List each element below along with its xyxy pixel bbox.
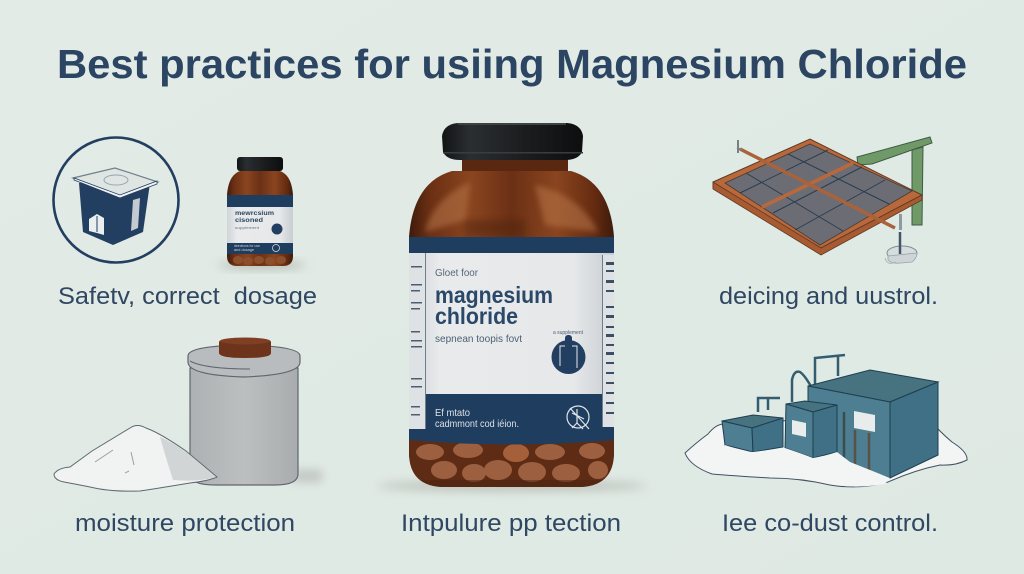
large tank: [808, 370, 938, 478]
label body: [409, 253, 614, 394]
label: deicing and control: deicing and uustrol.: [719, 283, 938, 310]
icon: large amber jar: chloride: [435, 303, 518, 329]
label subtitle: sepnean toopis fovt: [435, 333, 522, 345]
icon: small supplement bottle: cisoned: [235, 218, 263, 224]
front snow mound: [725, 445, 890, 487]
pills: [409, 440, 615, 488]
icon: framed deicing mat: [713, 137, 932, 263]
icon: tanks on snow: [685, 355, 967, 487]
green support: [857, 137, 932, 225]
icon: prohibition symbol: [567, 406, 589, 429]
valve and spool: [885, 214, 917, 263]
snow patch: [685, 420, 967, 487]
jar glass: [409, 171, 614, 487]
panel: ice and dust control: [685, 355, 967, 537]
label dosage text: Ef mtato: [435, 407, 470, 419]
icon: navy label seal: a supplement: [553, 330, 584, 336]
small tank: [722, 415, 783, 452]
label: ice and dust control: Iee co-dust control.: [722, 510, 938, 537]
jar cap: [442, 123, 583, 160]
label small heading: Gloet foor: [435, 267, 478, 279]
icon: small supplement bottle: and dosage: [234, 248, 254, 252]
icon: small supplement bottle: [218, 157, 306, 268]
label band top: [409, 237, 614, 253]
panel: main supplement jar: [377, 123, 647, 537]
panel: deicing and control: [713, 137, 938, 310]
jar shadow: [377, 481, 647, 491]
title: Best practices for usiing Magnesium Chloride: [57, 41, 967, 87]
panel: safety and correct dosage: [54, 138, 317, 310]
icon: small supplement bottle: supplement: [235, 225, 260, 230]
slate grid: [725, 144, 912, 245]
icon: large amber jar: cadmmont cod iéion.: [435, 418, 519, 430]
jar neck: [462, 158, 568, 174]
icon: navy label seal: [552, 330, 586, 374]
icon: small supplement bottle: directions for use: [234, 244, 260, 248]
icon: large amber jar: [409, 123, 615, 488]
left label panel: [409, 253, 426, 429]
pipes: [792, 355, 845, 402]
label: safety, correct dosage: Safetv, correct dosage: [58, 283, 317, 310]
icon: sealed container with powder pile: [54, 338, 322, 491]
icon: small supplement bottle: mewrcsium: [235, 211, 274, 217]
glass highlights: [425, 182, 598, 232]
panel: moisture protection: [54, 338, 322, 537]
label: moisture protection: moisture protection: [75, 510, 295, 537]
label band bottom: [409, 394, 614, 444]
right label panel: [602, 255, 614, 427]
medium tank: [785, 401, 837, 458]
label product name: magnesium: [435, 282, 553, 308]
icon: circled storage container: [54, 138, 178, 262]
label: main jar caption: Intpulure pp tection: [401, 510, 621, 537]
wooden frame: [713, 139, 922, 248]
